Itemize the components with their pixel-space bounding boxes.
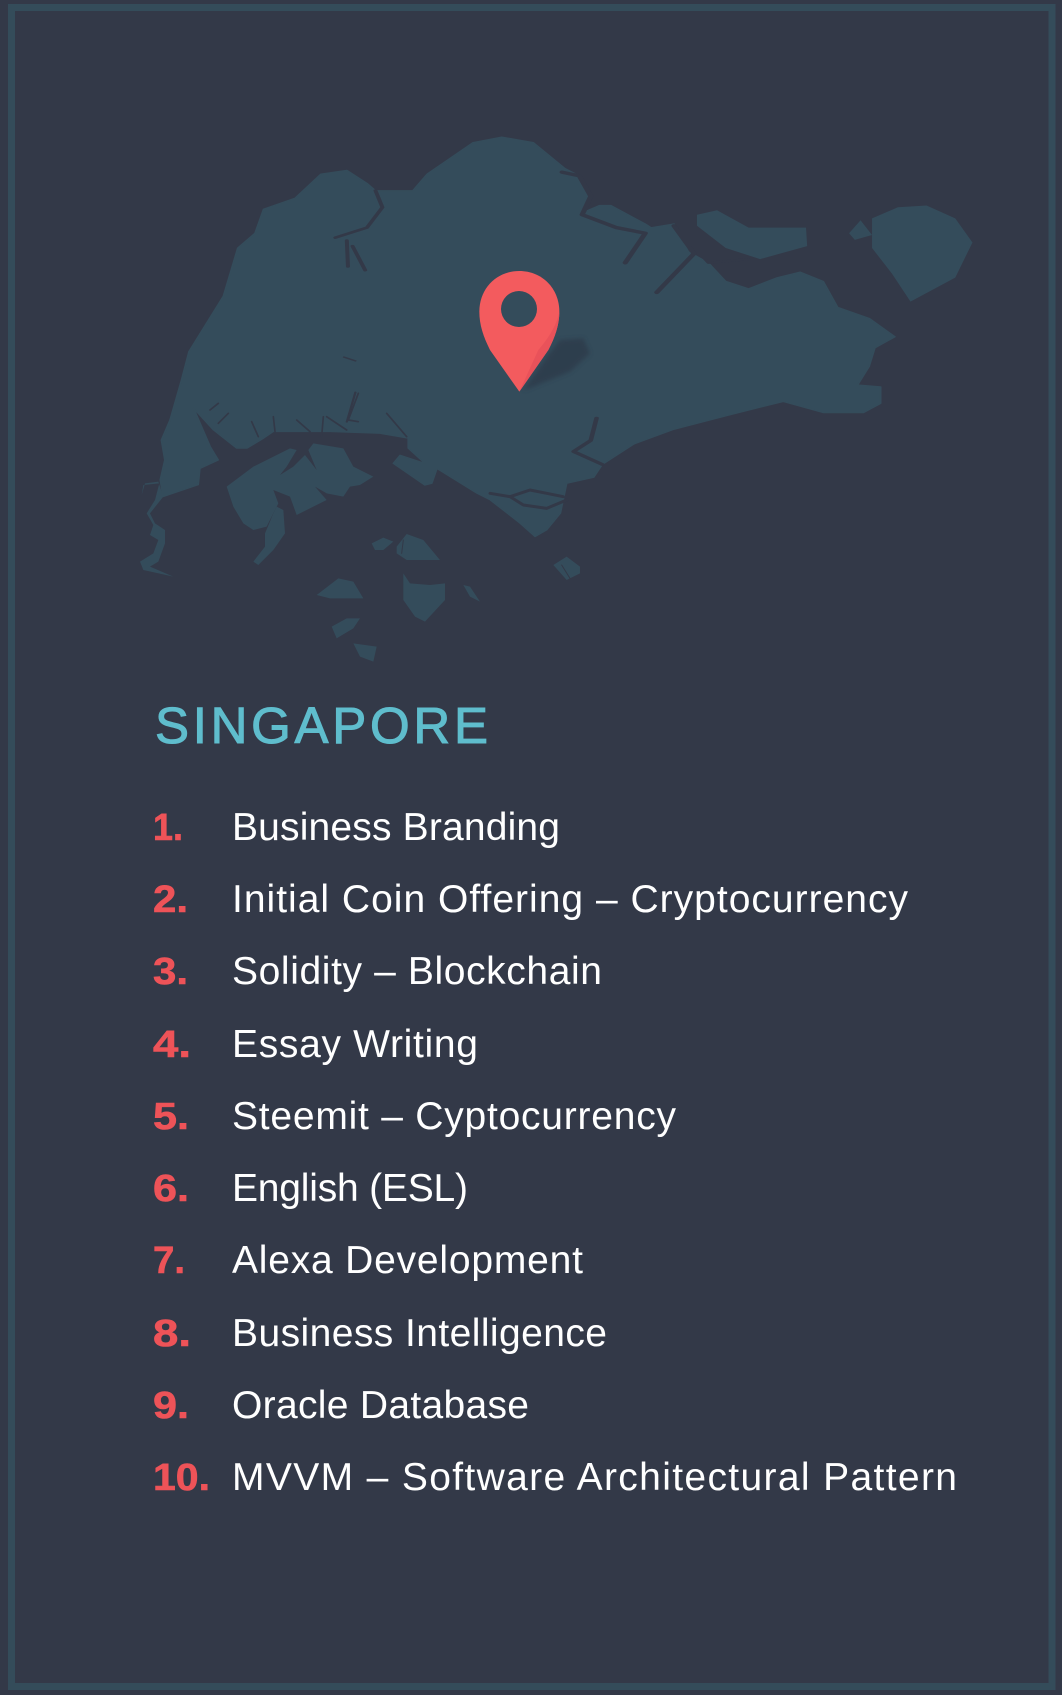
item 9 label: Oracle Database bbox=[232, 1384, 529, 1427]
Pulau Tekong bbox=[849, 205, 972, 302]
item 4 number: 4. bbox=[153, 1024, 191, 1066]
item 1 number: 1. bbox=[153, 807, 183, 849]
west coast strips bbox=[140, 482, 173, 577]
southern islands bbox=[317, 534, 580, 662]
pin hole bbox=[501, 291, 537, 327]
Jurong island bbox=[227, 443, 373, 530]
pin body bbox=[479, 271, 559, 392]
item 10 label: MVVM – Software Architectural Pattern bbox=[232, 1456, 957, 1499]
southern shore inlets bbox=[210, 393, 570, 578]
strip south of Jurong bbox=[253, 507, 285, 565]
item 6 number: 6. bbox=[153, 1168, 189, 1210]
pin shadow bbox=[523, 338, 590, 391]
item 5 number: 5. bbox=[153, 1096, 189, 1138]
item 5 label: Steemit – Cyptocurrency bbox=[232, 1095, 676, 1138]
item 8 label: Business Intelligence bbox=[232, 1312, 607, 1355]
item 3 number: 3. bbox=[153, 951, 188, 993]
item 9 number: 9. bbox=[153, 1385, 189, 1427]
item 7 number: 7. bbox=[153, 1240, 185, 1282]
item 2 label: Initial Coin Offering – Cryptocurrency bbox=[232, 878, 908, 921]
main island bbox=[160, 137, 895, 537]
item 4 label: Essay Writing bbox=[232, 1023, 478, 1066]
Pulau Ubin bbox=[697, 210, 807, 259]
title: SINGAPORE bbox=[155, 697, 488, 754]
map of Singapore bbox=[140, 137, 972, 662]
list of skills bbox=[153, 806, 957, 1499]
item 3 label: Solidity – Blockchain bbox=[232, 950, 602, 993]
item 10 number: 10. bbox=[153, 1457, 210, 1499]
item 2 number: 2. bbox=[153, 879, 188, 921]
northern and eastern inlets bbox=[335, 172, 749, 464]
item 8 number: 8. bbox=[153, 1313, 191, 1355]
item 1 label: Business Branding bbox=[232, 806, 560, 849]
item 6 label: English (ESL) bbox=[232, 1167, 468, 1210]
item 7 label: Alexa Development bbox=[232, 1239, 583, 1282]
map pin with shadow bbox=[479, 271, 590, 392]
pin fold bbox=[519, 312, 559, 392]
